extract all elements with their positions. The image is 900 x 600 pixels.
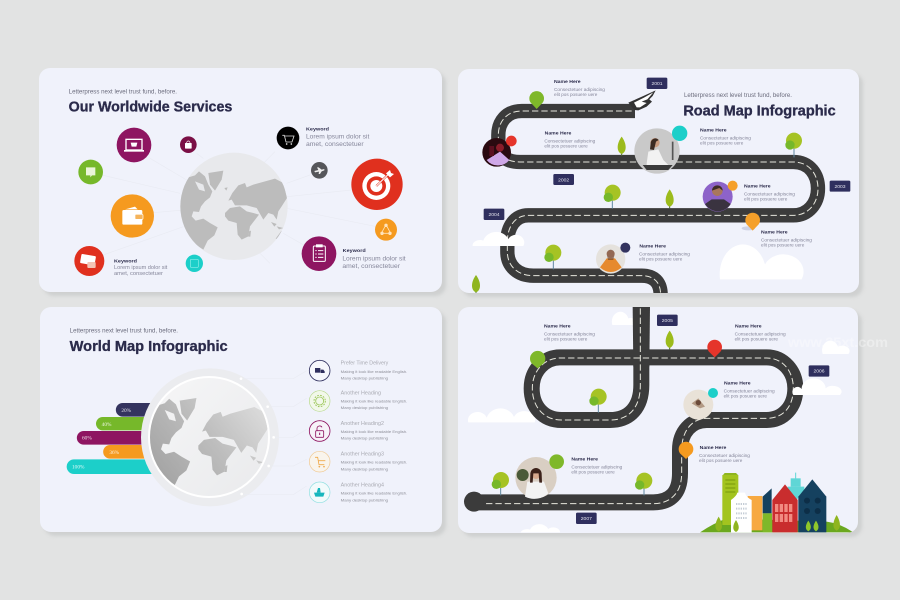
text: heading 3: Another Heading3 [341,452,384,458]
text: name 5: Consectetuer adipiscing [571,464,623,469]
watermark: www.25xt.com [787,334,888,350]
cloud: left [468,408,535,422]
year 2004 [484,209,504,220]
text: name 5: elit pos posuere uere [571,469,615,474]
text: name 3 [700,127,752,145]
photo 1 [482,138,511,167]
cloud on road [792,378,842,395]
dot teal [708,388,718,398]
photo 3 [703,182,733,212]
panel: World Map Infographic [40,307,446,536]
tree: round center [604,185,621,209]
bar 36%: 36% [109,450,120,456]
text: keyword top [306,126,370,148]
text: heading 1: Making it look like readable English. [341,399,407,403]
text: keyword left: amet, consectetuer [114,271,163,277]
year 2001: 2001 [651,81,663,87]
text: name 4: elit pos posuere uere [699,458,743,463]
text: heading 3 [341,452,407,472]
year 2003 [830,181,850,192]
pin: orange [742,213,760,231]
text: heading 2: Many desktop publishing [341,436,388,440]
title: Road Map Infographic [683,103,836,119]
icon: credit card [74,246,104,276]
text: heading 2: Another Heading2 [341,421,384,427]
text: name 2 [735,324,786,342]
text: name 5: Name Here [571,456,598,461]
text: name 3: Name Here [700,127,727,132]
text: heading 4: Making it look like readable English. [341,491,407,495]
bar chart [67,403,163,474]
text: name 3: elit pos posuere uere [724,393,768,398]
subtitle: Letterpress next level trust fund, before. [69,89,177,95]
text: heading 3: Making it look like readable English. [341,461,407,465]
text: name 4: Consectetuer adipiscing [744,191,796,196]
text: name 2: Consectetuer adipiscing [735,332,786,337]
text: heading 4 [341,482,407,502]
text: name 4: Name Here [744,183,771,188]
text: name 4 [744,183,796,201]
icon: speech note [78,160,103,184]
text: keyword left: Lorem ipsum dolor sit [114,265,168,271]
text: name 3 [724,380,775,398]
bar 20%: 20% [121,408,132,414]
icon: wallet [111,194,154,238]
icon: teal ship [309,482,330,503]
icon: truck [309,360,330,381]
cloud: bottom [521,524,560,532]
text: heading 2 [341,421,407,440]
year 2004: 2004 [488,212,500,218]
icon: shopping bag [180,136,197,153]
dot red [506,136,517,146]
tree: round loop [589,389,607,413]
photo 4 [596,244,625,274]
text: name 4: Consectetuer adipiscing [699,453,751,458]
bar 60%: 60% [82,436,92,442]
title: Our Worldwide Services [69,100,232,116]
text: name 5: Name Here [761,230,788,235]
text: name 5 [761,230,813,248]
icon: teal calendar [186,255,203,272]
text: name 4: elit pos posuere uere [744,196,788,201]
year 2002 [553,174,574,185]
icon: laptop cart [117,128,151,162]
text: keyword top: Keyword [306,126,329,132]
text: name 6: elit pos posuere uere [639,257,683,262]
subtitle: Letterpress next level trust fund, before. [70,329,178,335]
dot green [549,454,564,469]
tree: leaf [666,331,674,350]
year 2002: 2002 [558,177,569,183]
text: keyword right: Keyword [343,248,366,254]
text: name 1: elit pos posuere uere [554,92,598,97]
text: name 1: Consectetuer adipiscing [544,332,596,337]
year 2005: 2005 [662,318,673,324]
road [498,111,818,295]
text: name 2: elit pos posuere uere [735,337,779,342]
photo 2 [634,128,680,174]
pin: green [530,351,545,368]
icon: padlock [309,421,330,441]
photo: top [683,390,713,420]
text: delivery: Making it look like readable English. [341,370,407,374]
tree: leaf 3 [472,275,480,294]
pin: orange [679,442,693,459]
text: delivery [341,361,407,380]
text: name 1: Consectetuer adipiscing [554,87,606,92]
text: name 5 [571,456,623,474]
text: name 2: Name Here [545,130,572,135]
tree: leaf 1 [618,137,626,156]
text: heading 1: Many desktop publishing [341,406,388,410]
text: name 5: elit pos posuere uere [761,243,805,248]
year 2006 [809,365,829,377]
pin: green [529,91,544,109]
text: name 2 [544,130,596,149]
cloud: top [612,312,633,325]
text: name 6: Consectetuer adipiscing [639,252,691,257]
tree: round right [785,133,802,157]
text: name 6 [639,244,691,262]
text: name 1: Name Here [554,79,581,84]
text: keyword right: Lorem ipsum dolor sit [342,256,406,263]
title: World Map Infographic [70,339,228,355]
text: name 1 [554,79,606,97]
tree: round left [492,472,509,495]
icon: cart outline [309,451,330,472]
connector lines [102,152,377,263]
panel: Our Worldwide Services [39,68,446,296]
bar 40%: 40% [102,422,112,428]
text: heading 1 [341,390,407,410]
text: keyword right: amet, consectetuer [342,263,400,270]
text: name 2: Name Here [735,324,762,329]
photo: bottom [515,457,557,499]
icon: airplane [311,162,328,179]
text: heading 1: Another Heading [341,390,381,396]
text: name 1: Name Here [544,324,571,329]
icon: target [351,159,403,210]
text: name 3: Name Here [724,380,751,385]
year 2001 [647,78,667,89]
text: keyword top: Lorem ipsum dolor sit [306,134,370,141]
city illustration [700,473,853,532]
year 2006: 2006 [813,369,825,375]
year 2007 [576,513,597,524]
road [464,307,795,512]
year 2007: 2007 [581,516,592,522]
text: name 1: elit pos posuere uere [544,337,588,342]
subtitle: Letterpress next level trust fund, before. [684,92,792,99]
text: delivery: Prefer Time Delivery [341,361,389,367]
icon: network [375,219,397,241]
text: heading 4: Many desktop publishing [341,498,388,502]
pin: red [707,340,722,357]
year 2003: 2003 [834,184,846,190]
globe [141,368,279,506]
tree: round lower [544,245,561,269]
cloud: top right [822,341,850,354]
text: name 2: Consectetuer adipiscing [544,139,596,144]
icon: clipboard [302,236,336,271]
panel: road map with city [458,307,862,537]
text: name 2: elit pos posuere uere [544,144,588,149]
dot navy [620,243,630,253]
text: keyword right [342,248,406,270]
text: name 3: elit pos posuere uere [700,140,744,145]
text: name 6: Name Here [639,244,666,249]
text: name 4: Name Here [700,445,727,450]
globe [175,153,288,260]
text: delivery: Many desktop publishing [341,376,388,380]
tree: round center [635,473,652,495]
year 2005 [657,315,678,326]
panel: Road Map Infographic [458,69,863,297]
text: name 3: Consectetuer adipiscing [700,135,752,140]
cloud on road [473,232,524,246]
text: name 5: Consectetuer adipiscing [761,238,813,243]
text: name 1 [544,324,596,342]
icon: shopping cart [277,127,299,149]
connector lines [243,371,307,495]
bar 100%: 100% [72,465,85,471]
text: heading 2: Making it look like readable English. [341,430,407,434]
text: heading 3: Many desktop publishing [341,468,388,472]
tree: leaf 2 [666,189,674,209]
text: name 3: Consectetuer adipiscing [724,388,775,393]
text: name 4 [699,445,751,463]
icon: gear [309,391,330,411]
text: heading 4: Another Heading4 [341,482,384,488]
text: keyword left: Keyword [114,258,137,264]
icon: pointing hand [628,90,656,110]
text: keyword left [114,258,168,277]
dot orange [728,181,738,191]
big cloud [720,244,804,279]
text: keyword top: amet, consectetuer [306,141,364,148]
dot teal [672,126,687,141]
